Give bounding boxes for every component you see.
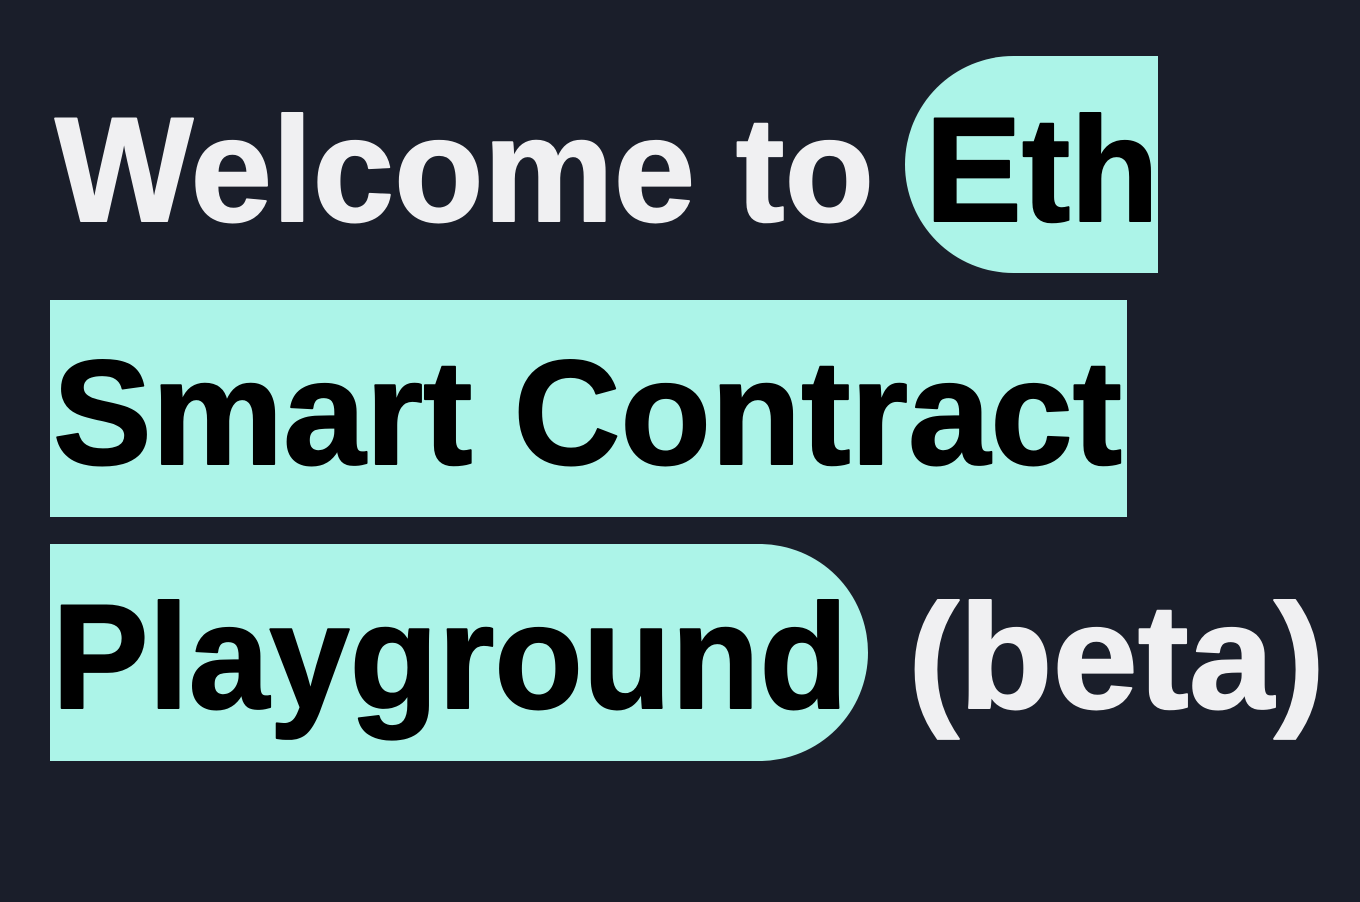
text: Welcome to: Welcome to	[55, 86, 874, 253]
text: Eth: Eth	[925, 86, 1159, 253]
highlight: Eth	[905, 56, 1158, 273]
text: Playground: Playground	[52, 573, 848, 740]
highlight: Playground	[50, 544, 868, 761]
text: (beta): (beta)	[908, 573, 1325, 740]
text: Smart Contract: Smart Contract	[53, 329, 1122, 496]
highlight: Smart Contract	[50, 300, 1127, 517]
